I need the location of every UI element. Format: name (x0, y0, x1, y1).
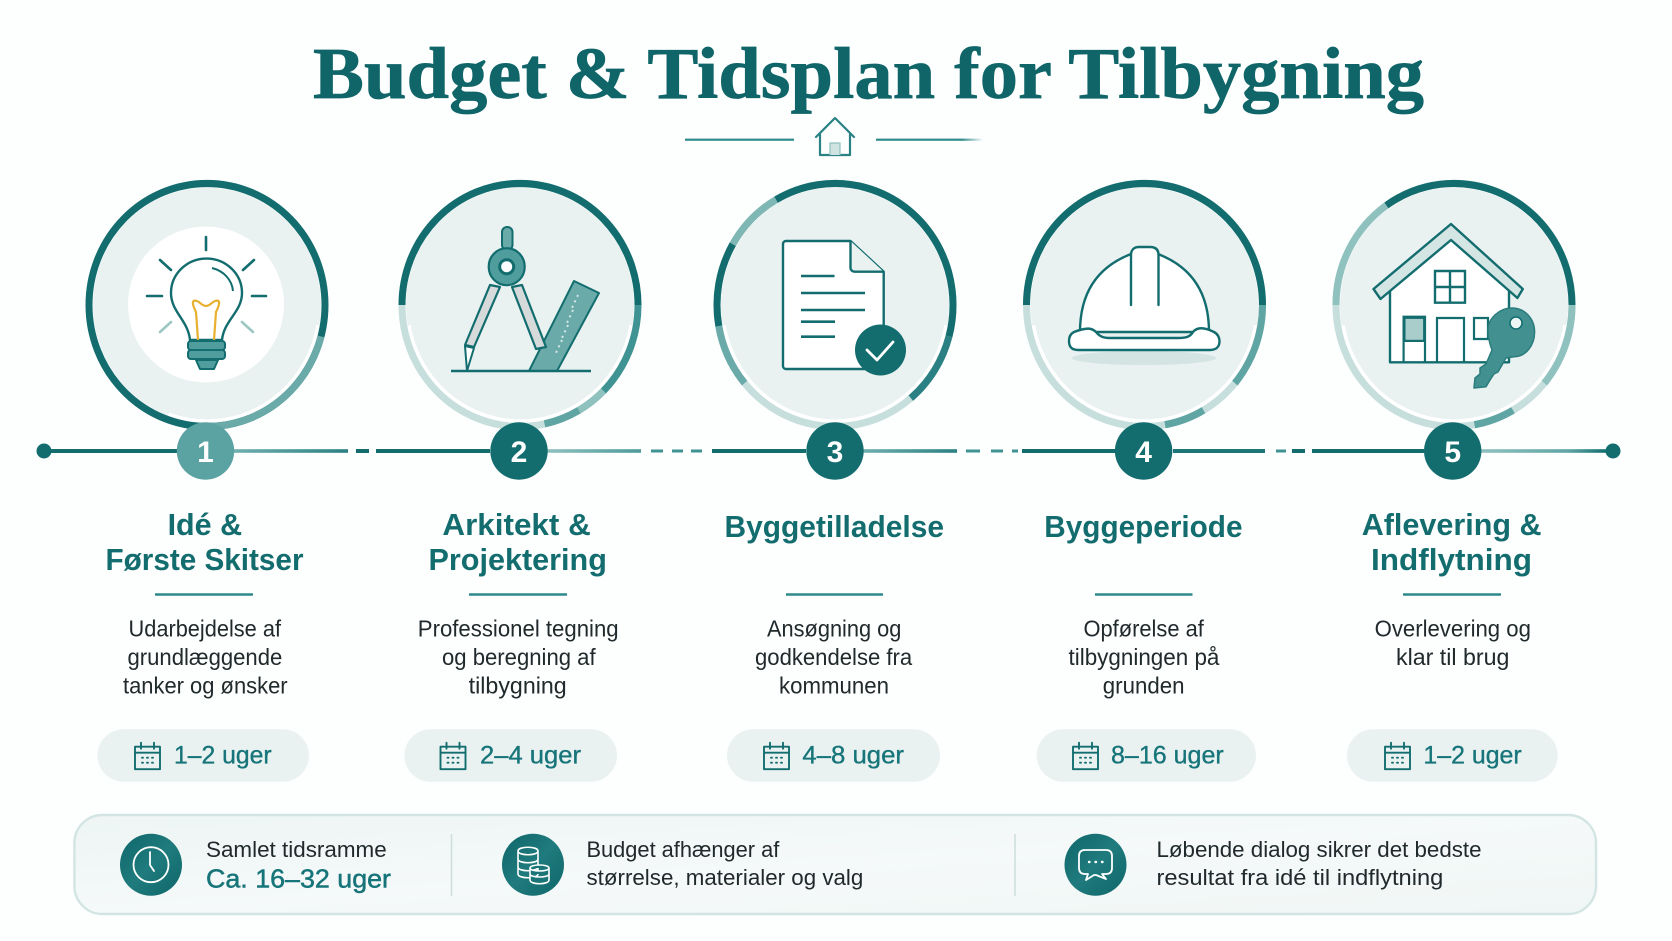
heading: Første Skitser (106, 543, 304, 577)
icon: clock (120, 834, 182, 896)
heading: Idé & (168, 508, 242, 542)
icon: document with check badge (783, 241, 906, 376)
duration pill: 4–8 uger (802, 741, 904, 769)
description: tilbygningen på (1068, 644, 1220, 670)
duration pill: 2–4 uger (480, 741, 581, 769)
heading: Projektering (428, 543, 607, 577)
circle with document (669, 134, 1001, 476)
icon: compass and ruler (451, 227, 599, 371)
text: budget note (586, 837, 863, 890)
description: Ansøgning og (767, 616, 901, 642)
heading: Byggetilladelse (724, 510, 944, 544)
icon: chat bubble (1064, 834, 1126, 896)
heading: Aflevering & (1362, 508, 1542, 542)
description: grundlæggende (128, 644, 282, 670)
duration pill: 1–2 uger (1423, 741, 1522, 769)
description (1068, 616, 1220, 698)
panel: step 1 (62, 156, 352, 782)
description: godkendelse fra (755, 644, 912, 670)
panel: step 3 (669, 134, 1001, 782)
text: budget note: Budget afhænger af (586, 837, 780, 862)
description: klar til brug (1396, 644, 1509, 670)
description: kommunen (779, 672, 889, 698)
duration pill: 8–16 uger (1111, 741, 1224, 769)
number badge 3: 3 (827, 436, 843, 469)
icon: coins (502, 834, 564, 896)
heading (1362, 508, 1542, 577)
text: total timeframe: Ca. 16–32 uger (206, 863, 391, 893)
number badge 5 (1424, 422, 1481, 480)
text: dialogue note: resultat fra idé til indflytning (1156, 865, 1443, 890)
icon: hard hat (1069, 247, 1220, 365)
description: Overlevering og (1375, 616, 1531, 642)
text: total timeframe (206, 837, 391, 893)
timeline (36, 444, 1620, 458)
number badge 2 (490, 422, 548, 480)
description: grunden (1103, 672, 1184, 698)
heading: Byggeperiode (1044, 510, 1242, 544)
description (755, 616, 912, 698)
description (418, 616, 619, 698)
description: og beregning af (442, 644, 596, 670)
description: Udarbejdelse af (128, 616, 282, 642)
number badge 3 (806, 422, 864, 480)
panel: step 4 (983, 139, 1306, 782)
text: budget note: størrelse, materialer og valg (586, 865, 863, 890)
circle with compass and ruler (353, 133, 687, 477)
number badge 4: 4 (1135, 436, 1152, 469)
panel: step 2 (353, 133, 687, 782)
circle with lightbulb (62, 156, 352, 454)
description: Professionel tegning (418, 616, 619, 642)
number badge 4 (1115, 422, 1172, 480)
duration pill: 1–2 uger (174, 741, 272, 769)
circle with house and key (1290, 136, 1618, 474)
panel: step 5 (1290, 136, 1618, 782)
description: tilbygning (469, 672, 567, 698)
heading: Arkitekt & (442, 508, 591, 542)
description: Opførelse af (1084, 616, 1204, 642)
number badge 1 (177, 422, 234, 480)
description: tanker og ønsker (123, 672, 288, 698)
circle with hard hat (983, 139, 1306, 471)
duration pill (1347, 729, 1558, 782)
number badge 2: 2 (511, 436, 527, 469)
panel: bottom summary bar (74, 815, 1596, 914)
duration pill (404, 729, 617, 782)
duration pill (1037, 729, 1256, 782)
number badge 5: 5 (1444, 436, 1461, 469)
duration pill (727, 729, 940, 782)
text: total timeframe: Samlet tidsramme (206, 837, 387, 862)
text: dialogue note: Løbende dialog sikrer det bedste (1156, 837, 1482, 862)
text: dialogue note (1156, 837, 1482, 890)
heading: Indflytning (1371, 543, 1532, 577)
description (123, 616, 288, 698)
duration pill (98, 729, 309, 782)
heading (106, 508, 304, 577)
icon: title house ornament with rules (685, 118, 983, 155)
title: Budget & Tidsplan for Tilbygning (313, 33, 1424, 114)
icon: lightbulb (147, 237, 266, 369)
icon: house with key (1374, 224, 1535, 388)
heading (428, 508, 607, 577)
description (1375, 616, 1531, 670)
number badge 1: 1 (197, 436, 214, 469)
